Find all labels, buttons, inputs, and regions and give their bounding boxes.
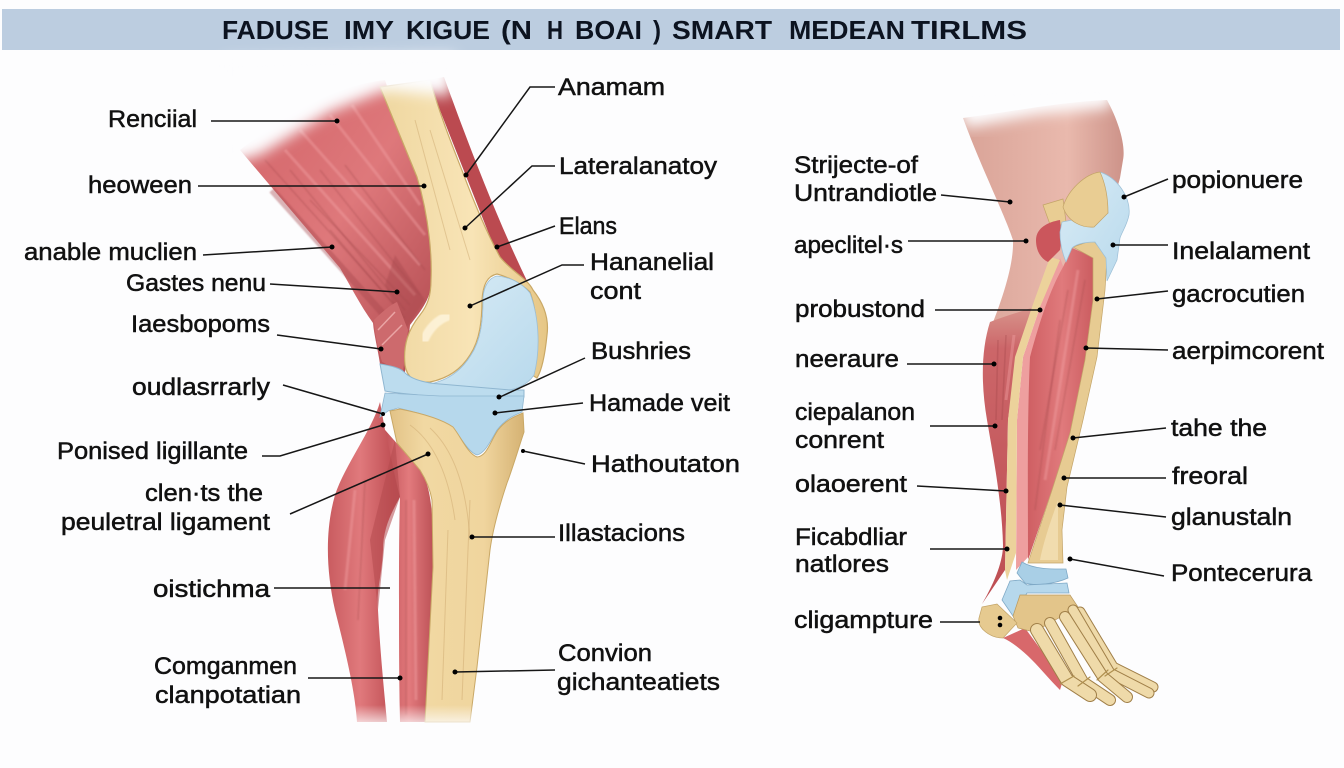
- label: Strijecte-of Untrandiotle: Untrandiotle: [794, 180, 937, 207]
- label: probustond: probustond: [795, 296, 925, 323]
- illustration: lower leg and foot: [955, 85, 1153, 700]
- label: Hananelial cont: Hananelial: [590, 249, 714, 276]
- label: freoral: freoral: [1172, 463, 1248, 490]
- label: heoween: [88, 172, 426, 199]
- fade top: [225, 55, 455, 165]
- title: IMY: [344, 15, 394, 45]
- femur: [380, 80, 547, 382]
- label: Convion gichanteatiets: [452, 640, 720, 696]
- label: glanustaln: [1058, 502, 1292, 531]
- label: anable muclien: anable muclien: [24, 239, 197, 266]
- label: clen-ts the peuletral ligament: [61, 452, 430, 536]
- label: Comganmen clanpotatian: clanpotatian: [155, 682, 301, 709]
- red tissue at back of knee: [1036, 220, 1062, 262]
- label: ciepalanon conrent: conrent: [795, 427, 884, 454]
- pink interosseous tissue: [1016, 258, 1072, 570]
- label: Gastes nenu: Gastes nenu: [126, 270, 266, 297]
- label: olaoerent: [795, 471, 1008, 498]
- fade bottom: [320, 705, 510, 730]
- patella: [1063, 172, 1108, 227]
- femoral cartilage: [430, 276, 538, 390]
- label: ciepalanon conrent: ciepalanon: [795, 399, 915, 426]
- label: Gastes nenu: [126, 270, 400, 297]
- label: Elans: [494, 213, 617, 250]
- label: Hathoutaton: Hathoutaton: [591, 451, 740, 478]
- label: oistichma: oistichma: [153, 576, 271, 603]
- label: neeraure: neeraure: [795, 346, 899, 373]
- title: TIRLMS: [911, 15, 1027, 45]
- label: tahe the: tahe the: [1171, 415, 1267, 442]
- label: oudlasrrarly: oudlasrrarly: [132, 374, 270, 401]
- label: Anamam: Anamam: [558, 74, 665, 101]
- title: KIGUE: [406, 15, 490, 45]
- tibia: [390, 409, 524, 722]
- ankle cartilage upper: [1017, 562, 1068, 584]
- label: popionuere: [1122, 167, 1303, 200]
- label: oudlasrrarly: [132, 374, 385, 416]
- label: heoween: heoween: [88, 172, 192, 199]
- labels: left knee, left column: [24, 106, 430, 709]
- knee cartilage: [1060, 172, 1129, 281]
- label: Ficabdliar natlores: Ficabdliar: [795, 524, 907, 551]
- calcaneus: [979, 604, 1017, 638]
- label: aerpimcorent: aerpimcorent: [1172, 338, 1324, 365]
- label: anable muclien: [24, 239, 334, 266]
- label: clen-ts the peuletral ligament: clen·ts the: [145, 480, 263, 507]
- title banner: [2, 9, 1340, 50]
- label: Convion gichanteatiets: Convion: [558, 640, 652, 667]
- label: Renciial: [108, 106, 340, 133]
- label: Elans: Elans: [559, 213, 617, 240]
- title: ): [653, 15, 661, 45]
- label: neeraure: [795, 346, 996, 373]
- label: aerpimcorent: [1084, 338, 1324, 365]
- label: Comganmen clanpotatian: [154, 653, 402, 709]
- plantar muscle: [1003, 628, 1063, 690]
- label: Pontecerura: [1068, 556, 1313, 587]
- label: Pontecerura: Pontecerura: [1171, 560, 1313, 587]
- label: probustond: [795, 296, 1042, 323]
- label: Convion gichanteatiets: gichanteatiets: [557, 669, 720, 696]
- label: Inelalament: [1110, 238, 1310, 265]
- label: apeclitel-s: apeclitel·s: [794, 232, 903, 259]
- thigh muscle, rear band: [428, 77, 528, 283]
- title: [222, 15, 1027, 45]
- tibia: [1028, 240, 1107, 563]
- title: MEDEAN: [789, 15, 905, 45]
- label: Inelalament: Inelalament: [1172, 238, 1310, 265]
- label: gacrocutien: [1094, 281, 1305, 308]
- title: BOAI: [575, 15, 642, 45]
- labels: lower leg, left column: [794, 152, 1042, 634]
- meniscus: [380, 364, 524, 398]
- label: Anamam: [464, 74, 665, 178]
- title: SMART: [672, 15, 772, 45]
- label: Ficabdliar natlores: [795, 524, 1010, 578]
- femur stub: [1043, 199, 1066, 230]
- label: Hananelial cont: [468, 249, 714, 308]
- title: H: [547, 15, 563, 45]
- label: popionuere: popionuere: [1172, 167, 1303, 194]
- label: Comganmen clanpotatian: Comganmen: [154, 653, 297, 680]
- label: gacrocutien: gacrocutien: [1172, 281, 1305, 308]
- lower leg muscle, posterior: [328, 402, 420, 722]
- label: Hananelial cont: cont: [590, 278, 641, 305]
- label: Bushries: [496, 338, 691, 400]
- label: Lateralanatoy: [462, 153, 717, 230]
- tibial cartilage: [380, 393, 524, 455]
- thigh muscle: [240, 80, 432, 372]
- label: ciepalanon conrent: [795, 399, 998, 454]
- label: Hamade veit: Hamade veit: [589, 390, 730, 417]
- label: Iaesbopoms: Iaesbopoms: [131, 311, 270, 338]
- fibula: [1005, 257, 1060, 580]
- tarsal bones: [1013, 595, 1078, 632]
- label: cligampture: [794, 607, 1002, 634]
- metatarsals and toes: [1037, 610, 1153, 700]
- label: Lateralanatoy: Lateralanatoy: [559, 153, 717, 180]
- labels: left knee, right column: [452, 74, 740, 696]
- label: apeclitel-s: [794, 232, 1028, 259]
- label: Ficabdliar natlores: natlores: [795, 551, 889, 578]
- title: (N: [501, 15, 532, 45]
- label: Hamade veit: [492, 390, 730, 417]
- label: cligampture: cligampture: [794, 607, 933, 634]
- label: Renciial: Renciial: [108, 106, 197, 133]
- label: freoral: [1062, 463, 1248, 490]
- label: Ponised ligillante: [57, 422, 386, 465]
- illustration: knee joint and thigh, side view: [225, 55, 547, 730]
- labels: lower leg, right column: [1058, 167, 1324, 587]
- label: glanustaln: glanustaln: [1171, 504, 1292, 531]
- lower leg muscle, deep: [385, 430, 433, 722]
- label: Illastacions: [470, 520, 685, 547]
- label: clen-ts the peuletral ligament: peuletral ligament: [61, 509, 270, 536]
- title: FADUSE: [222, 15, 329, 45]
- calf muscle: [982, 307, 1034, 604]
- label: Strijecte-of Untrandiotle: [794, 152, 1012, 207]
- ankle cartilage lower: [1002, 580, 1069, 616]
- popliteal tendon tissue: [374, 302, 408, 372]
- label: Ponised ligillante: Ponised ligillante: [57, 438, 248, 465]
- label: Iaesbopoms: [131, 311, 384, 352]
- label: olaoerent: olaoerent: [795, 471, 907, 498]
- label: tahe the: [1070, 415, 1267, 442]
- label: Strijecte-of Untrandiotle: Strijecte-of: [794, 152, 918, 179]
- label: Illastacions: Illastacions: [558, 520, 685, 547]
- label: Hathoutaton: [521, 449, 740, 478]
- skin, thigh to calf: [963, 100, 1124, 330]
- label: Bushries: Bushries: [591, 338, 691, 365]
- tibialis muscle: [1028, 248, 1096, 560]
